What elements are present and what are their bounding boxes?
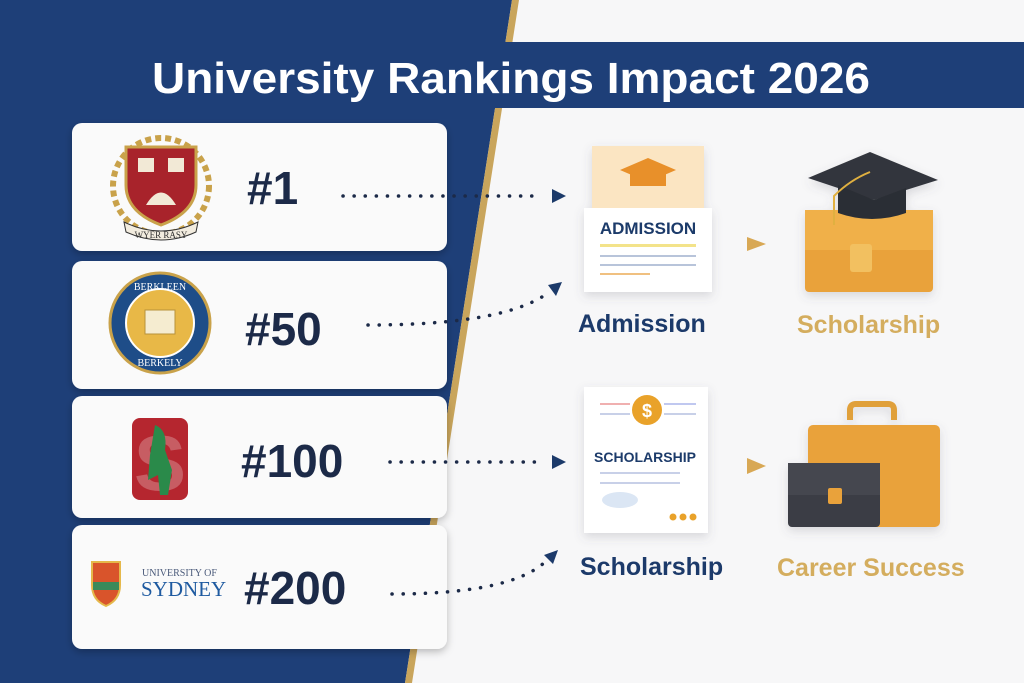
icon: Sydney logo: SYDNEY	[141, 577, 226, 601]
icon: seal	[110, 273, 210, 373]
icon: S logo: S	[134, 419, 186, 507]
icon: Sydney logo	[92, 562, 226, 606]
icon: seal: BERKELY	[137, 358, 183, 369]
label: Admission: Admission	[578, 310, 706, 338]
icon: seal: BERKLEEN	[134, 282, 186, 293]
card: rank #200	[72, 525, 447, 649]
icon: crest: WYER RASY	[135, 230, 188, 240]
icon: briefcases	[788, 404, 940, 527]
icon: scholarship certificate: SCHOLARSHIP	[594, 449, 696, 465]
arrows: dotted connectors	[343, 196, 545, 594]
card: rank #50	[72, 261, 447, 389]
card: rank #50: #50	[245, 303, 322, 355]
icon: admission letter	[584, 146, 712, 292]
icon: scholarship certificate: $	[642, 401, 652, 421]
icon: Sydney logo: UNIVERSITY OF	[142, 568, 217, 579]
card: rank #1	[72, 123, 447, 251]
card: rank #1: #1	[247, 162, 298, 214]
card: rank #200: #200	[244, 562, 346, 614]
navy left background	[0, 0, 512, 683]
arrow: gold 2	[747, 458, 766, 474]
icon: crest	[113, 138, 209, 240]
card: rank #100	[72, 396, 447, 518]
gold diagonal line	[405, 0, 519, 683]
title: University Rankings Impact 2026	[152, 54, 870, 103]
icon: briefcase with cap	[805, 152, 938, 292]
arrow: gold 1	[747, 237, 766, 251]
title band	[0, 42, 1024, 108]
icon: scholarship certificate	[584, 387, 708, 533]
card: rank #100: #100	[241, 435, 343, 487]
icon: admission letter: ADMISSION	[600, 219, 696, 238]
label: Scholarship gold: Scholarship	[797, 311, 940, 339]
label: Career Success: Career Success	[777, 554, 965, 582]
label: Scholarship navy: Scholarship	[580, 553, 723, 581]
